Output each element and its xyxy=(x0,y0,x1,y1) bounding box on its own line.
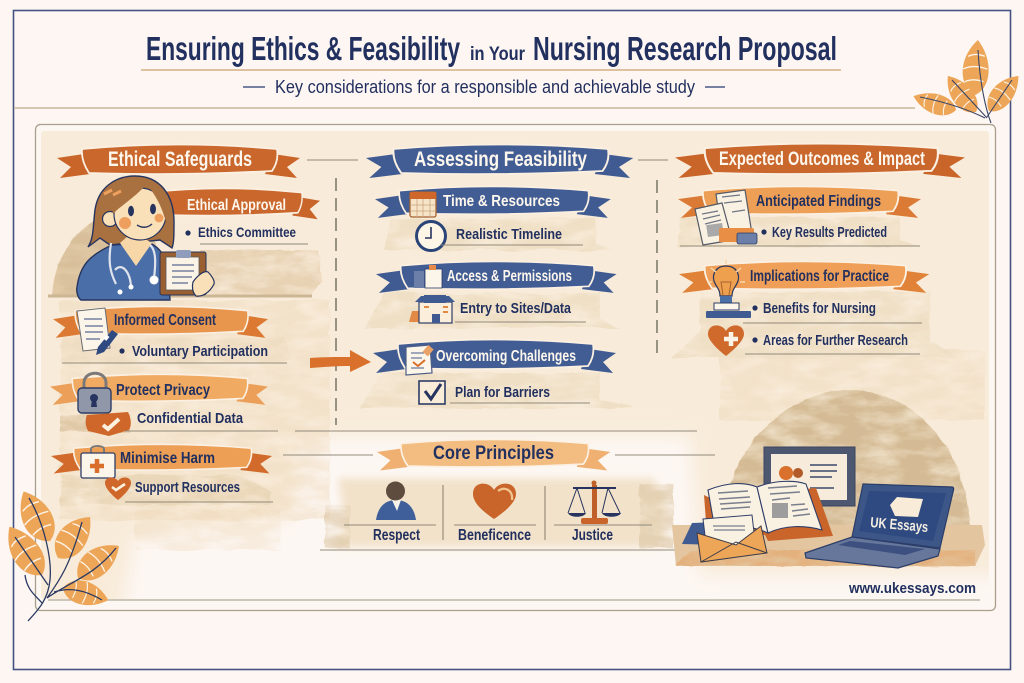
decoration: bottom left leaves xyxy=(0,485,127,621)
item: voluntary participation: Voluntary Participation xyxy=(132,343,268,360)
banner: time and resources: Time & Resources xyxy=(443,193,560,210)
icon: checklist document xyxy=(406,345,434,375)
banner: anticipated findings xyxy=(678,186,921,218)
monitor xyxy=(764,447,855,506)
laptop: UK Essays xyxy=(870,515,929,536)
icon: shield check badge xyxy=(86,412,131,436)
decoration: top right leaves xyxy=(910,39,1024,123)
banner: overcoming challenges: Overcoming Challenges xyxy=(436,348,576,365)
banner: implications: Implications for Practice xyxy=(750,268,889,285)
banner: access and permissions xyxy=(376,261,617,293)
item: ethics committee: Ethics Committee xyxy=(198,224,296,240)
banner: time and resources xyxy=(375,186,611,218)
banner: minimise harm: Minimise Harm xyxy=(120,450,215,467)
banner: informed consent xyxy=(53,306,268,338)
banner: protect privacy: Protect Privacy xyxy=(116,382,210,399)
washes xyxy=(360,218,635,408)
arrow xyxy=(310,350,371,372)
laptop xyxy=(805,484,954,568)
banner: core principles: Core Principles xyxy=(433,443,554,464)
item: ethics committee xyxy=(185,224,308,244)
banner: assessing feasibility xyxy=(366,144,633,178)
banner: core principles xyxy=(377,439,610,471)
item: support resources: Support Resources xyxy=(135,479,240,496)
label: beneficence: Beneficence xyxy=(458,527,531,544)
website url: www.ukessays.com xyxy=(848,580,976,597)
banner: ethical approval xyxy=(128,188,320,219)
nurse illustration xyxy=(77,176,214,300)
icon: scales of justice xyxy=(568,480,621,524)
banner: ethical approval: Ethical Approval xyxy=(187,197,286,214)
wash behind principles xyxy=(330,478,666,547)
icon: heart plus xyxy=(708,325,744,356)
banner: ethical safeguards xyxy=(57,144,300,178)
title xyxy=(146,30,837,67)
column: ethical safeguards xyxy=(48,144,322,505)
item: entry to sites/data: Entry to Sites/Data xyxy=(460,300,572,317)
banner: assessing feasibility: Assessing Feasibility xyxy=(414,148,587,171)
label: justice: Justice xyxy=(572,527,613,544)
envelope xyxy=(682,515,767,562)
wash: confidential data xyxy=(60,415,130,432)
title: Ensuring Ethics & Feasibility xyxy=(146,30,460,67)
column: assessing feasibility xyxy=(360,144,635,408)
nurse backdrop wash xyxy=(48,205,322,296)
icon: hospital buildings xyxy=(414,265,442,288)
item: areas for further research xyxy=(745,332,920,354)
icon: first aid kit xyxy=(81,446,115,478)
wash: informed consent xyxy=(60,338,292,362)
banner: minimise harm xyxy=(51,444,272,473)
title: Nursing Research Proposal xyxy=(533,30,837,67)
banner: protect privacy xyxy=(50,374,268,405)
label: respect: Respect xyxy=(373,527,421,544)
banner: overcoming challenges xyxy=(373,340,616,373)
icon: clock xyxy=(416,222,446,250)
item: plan for barriers: Plan for Barriers xyxy=(455,384,550,401)
item: benefits for nursing xyxy=(743,300,922,323)
banner: anticipated findings: Anticipated Findings xyxy=(756,193,881,210)
illustration: book, envelope, monitor, laptop xyxy=(672,390,985,568)
column: expected outcomes and impact xyxy=(672,144,965,358)
item: areas for further research: Areas for Further Research xyxy=(763,332,908,349)
panel: main paper background xyxy=(20,110,1010,620)
icon: padlock xyxy=(78,373,111,413)
item: key results predicted xyxy=(680,224,920,246)
icon: calendar xyxy=(410,192,436,217)
icon: heart xyxy=(473,484,516,519)
icon: heart check xyxy=(105,477,131,500)
banner: expected outcomes xyxy=(675,144,965,178)
icon: checkbox xyxy=(419,381,445,404)
item: benefits for nursing: Benefits for Nursing xyxy=(763,300,876,317)
item: key results predicted: Key Results Predicted xyxy=(772,224,887,241)
wash: support resources xyxy=(60,475,272,505)
dashed and connector lines xyxy=(283,160,715,455)
icon: light bulb on books xyxy=(706,260,751,318)
banner: implications xyxy=(679,261,929,293)
icon: person xyxy=(376,482,416,520)
item: voluntary participation xyxy=(62,343,287,363)
icon: consent form and pen xyxy=(77,308,118,355)
item: confidential data: Confidential Data xyxy=(137,410,244,427)
icon: entry building xyxy=(409,295,455,323)
washes xyxy=(672,218,958,358)
banner: informed consent: Informed Consent xyxy=(114,312,216,329)
banner: access and permissions: Access & Permissions xyxy=(447,268,572,285)
banner: expected outcomes: Expected Outcomes & Impact xyxy=(719,149,926,170)
hump backdrop xyxy=(672,390,985,566)
item: realistic timeline: Realistic Timeline xyxy=(456,226,562,243)
title: in Your xyxy=(470,44,526,65)
icon: papers and book xyxy=(695,190,757,245)
open book xyxy=(704,481,833,541)
section: core principles xyxy=(320,439,675,550)
banner: ethical safeguards: Ethical Safeguards xyxy=(108,148,252,171)
subtitle: Key considerations for a responsible and achievable study xyxy=(275,77,695,97)
